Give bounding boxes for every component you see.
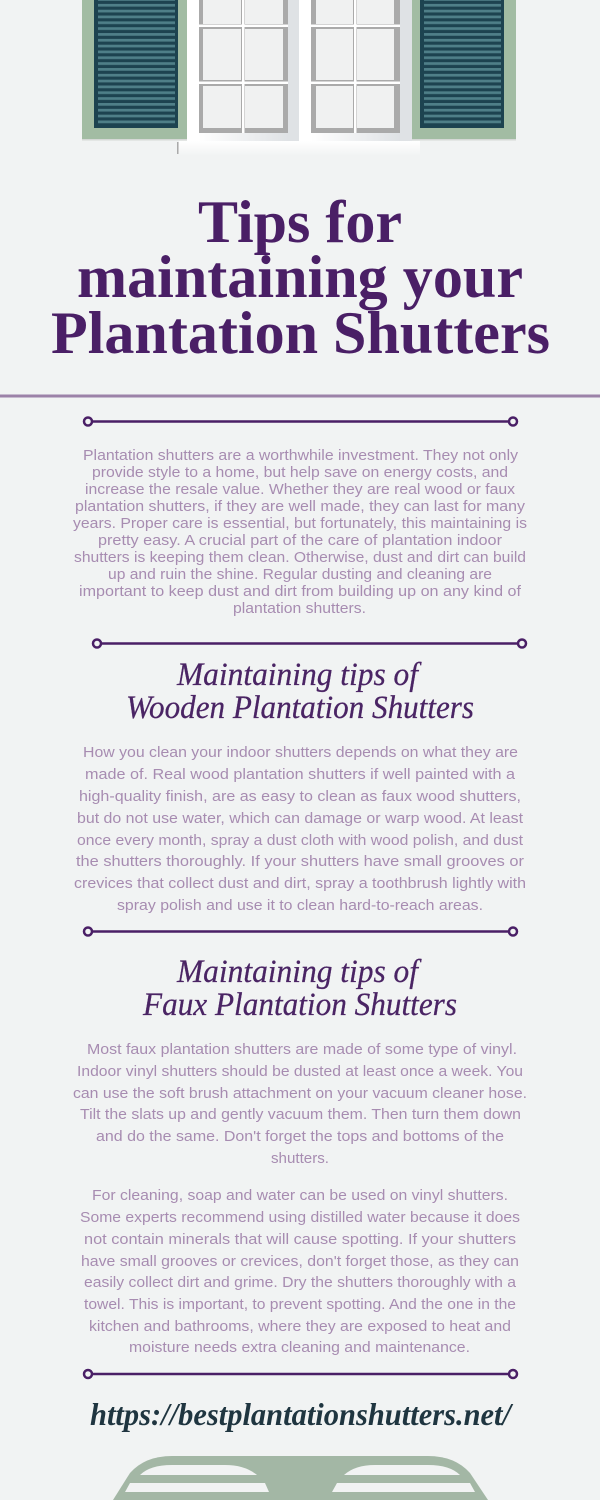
faux shutters paragraph 2: Some experts recommend using distilled water because it does — [80, 1209, 520, 1226]
intro paragraph: years. Proper care is essential, but fortunately, this maintaining is — [73, 515, 527, 532]
faux shutters paragraph 1: shutters. — [271, 1150, 329, 1167]
intro paragraph: important to keep dust and dirt from building up on any kind of — [79, 583, 522, 600]
intro paragraph: plantation shutters. — [233, 600, 366, 617]
intro paragraph: pretty easy. A crucial part of the care of plantation indoor — [98, 532, 502, 549]
left shutter — [82, 0, 187, 140]
title: maintaining your — [77, 244, 523, 310]
intro paragraph: up and ruin the shine. Regular dusting and cleaning are — [108, 566, 492, 583]
title: Plantation Shutters — [51, 300, 550, 366]
faux shutters paragraph 2: towel. This is important, to prevent spotting. And the one in the — [84, 1296, 516, 1313]
intro paragraph: plantation shutters, if they are well made, they can last for many — [75, 498, 526, 515]
intro paragraph: increase the resale value. Whether they are real wood or faux — [85, 481, 516, 498]
wooden shutters paragraph: crevices that collect dust and dirt, spray a toothbrush lightly with — [74, 875, 526, 892]
heading: faux shutters: Faux Plantation Shutters — [142, 987, 457, 1023]
divider 1 — [84, 418, 517, 426]
faux shutters paragraph 2 — [80, 1187, 520, 1356]
faux shutters paragraph 1: Indoor vinyl shutters should be dusted at least once a week. You — [77, 1063, 523, 1080]
illustration: bottom awning — [113, 1456, 488, 1500]
intro paragraph: shutters is keeping them clean. Otherwise, dust and dirt can build — [74, 549, 526, 566]
faux shutters paragraph 2: kitchen and bathrooms, where they are exposed to heat and — [89, 1318, 511, 1335]
divider 3 — [84, 928, 517, 936]
faux shutters paragraph 1: Tilt the slats up and gently vacuum them. Then turn them down — [80, 1106, 521, 1123]
faux shutters paragraph 2: easily collect dirt and grime. Dry the shutters thoroughly with a — [84, 1274, 517, 1291]
faux shutters paragraph 2: not contain minerals that will cause spotting. If your shutters — [84, 1231, 516, 1248]
wooden shutters paragraph: once every month, spray a dust cloth with wood polish, and dust — [77, 832, 524, 849]
window frame — [187, 0, 412, 141]
heading: wooden shutters: Maintaining tips of — [176, 657, 422, 693]
intro paragraph — [73, 447, 527, 617]
window sill — [177, 141, 420, 156]
wooden shutters paragraph: but do not use water, which can damage or warp wood. At least — [77, 810, 524, 827]
faux shutters paragraph 1: Most faux plantation shutters are made of some type of vinyl. — [87, 1041, 517, 1058]
heading: wooden shutters — [126, 657, 474, 726]
divider 2 — [93, 640, 526, 648]
divider 4 — [84, 1370, 517, 1378]
faux shutters paragraph 1: and do the same. Don't forget the tops and bottoms of the — [96, 1128, 504, 1145]
faux shutters paragraph 2: For cleaning, soap and water can be used on vinyl shutters. — [92, 1187, 508, 1204]
heading: wooden shutters: Wooden Plantation Shutters — [126, 690, 474, 726]
title — [51, 189, 550, 366]
heading: faux shutters — [142, 954, 457, 1023]
faux shutters paragraph 2: moisture needs extra cleaning and maintenance. — [129, 1339, 470, 1356]
illustration: window with shutters — [82, 0, 516, 156]
intro paragraph: provide style to a home, but help save on energy costs, and — [92, 464, 508, 481]
title: Tips for — [198, 189, 402, 255]
wooden shutters paragraph — [74, 744, 526, 914]
wooden shutters paragraph: made of. Real wood plantation shutters if well painted with a — [85, 766, 516, 783]
faux shutters paragraph 1 — [73, 1041, 527, 1167]
wooden shutters paragraph: high-quality finish, are as easy to clean as faux wood shutters, — [79, 788, 521, 805]
wooden shutters paragraph: How you clean your indoor shutters depends on what they are — [83, 744, 518, 761]
title rule — [0, 394, 600, 398]
intro paragraph: Plantation shutters are a worthwhile investment. They not only — [83, 447, 519, 464]
faux shutters paragraph 1: can use the soft brush attachment on your vacuum cleaner hose. — [73, 1085, 527, 1102]
heading: faux shutters: Maintaining tips of — [176, 954, 422, 990]
website url: https://bestplantationshutters.net/ — [90, 1396, 514, 1432]
wooden shutters paragraph: the shutters thoroughly. If your shutters have small grooves or — [76, 853, 524, 870]
wooden shutters paragraph: spray polish and use it to clean hard-to-reach areas. — [117, 897, 483, 914]
faux shutters paragraph 2: have small grooves or crevices, don't forget those, as they can — [81, 1253, 519, 1270]
right shutter — [412, 0, 516, 140]
